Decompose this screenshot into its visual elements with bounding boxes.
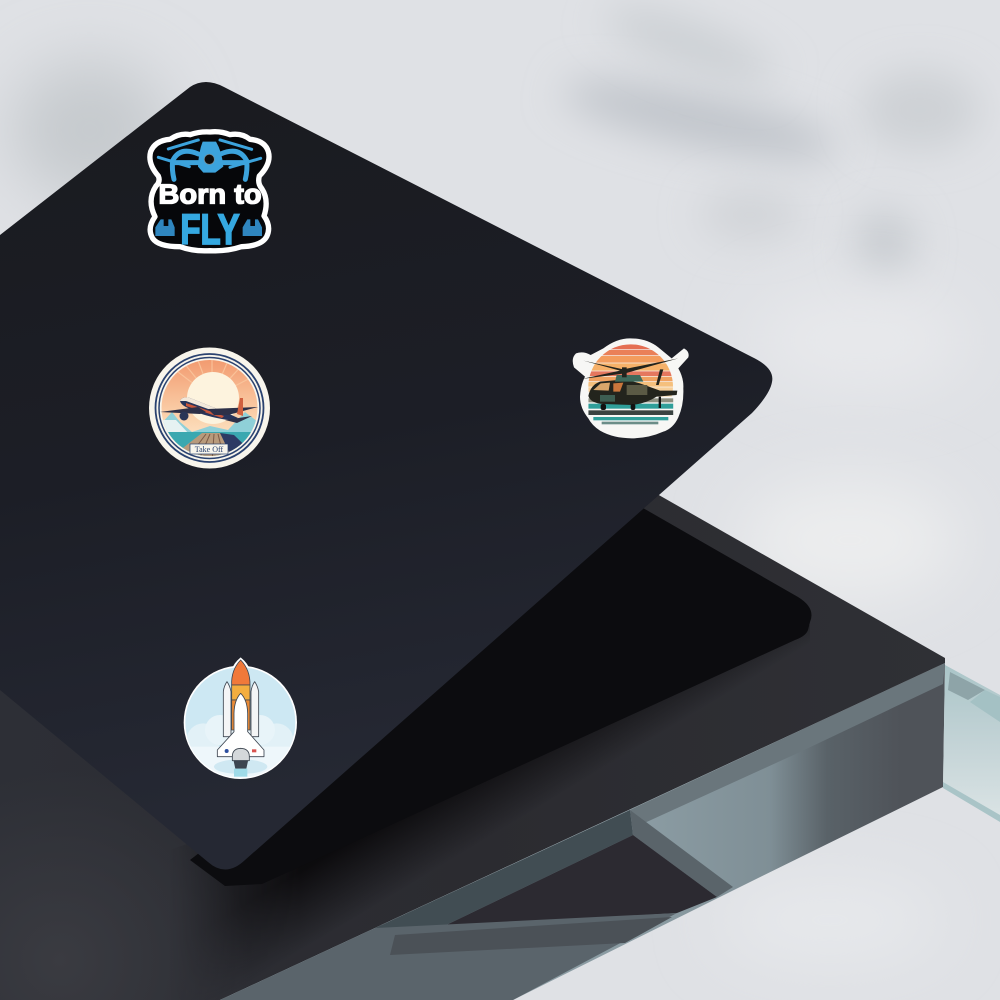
text: Born to: Born to (158, 178, 262, 209)
shadow: laptop cast shadow (196, 626, 810, 958)
icon: airplane (160, 397, 258, 423)
text: FLY: FLY (180, 206, 240, 254)
icon: controller right (243, 219, 262, 236)
icon: controller left (155, 219, 175, 236)
table: glass side edge (943, 665, 1000, 822)
icon: shuttle (217, 660, 264, 777)
laptop base (190, 508, 812, 886)
sticker: Take Off (149, 348, 270, 468)
label: Take Off: Take Off (195, 445, 224, 454)
laptop lid (0, 82, 772, 870)
sticker: Born to Fly (150, 132, 269, 254)
table: glass front edge (220, 663, 945, 1000)
bands: lower stripes (588, 398, 673, 424)
icon: drone (158, 140, 261, 179)
icon: helicopter (582, 358, 678, 410)
table: dark top (0, 490, 945, 1000)
glow: lighter table corner (0, 888, 134, 1000)
sticker: space shuttle (183, 657, 297, 780)
sticker: helicopter (573, 338, 689, 438)
